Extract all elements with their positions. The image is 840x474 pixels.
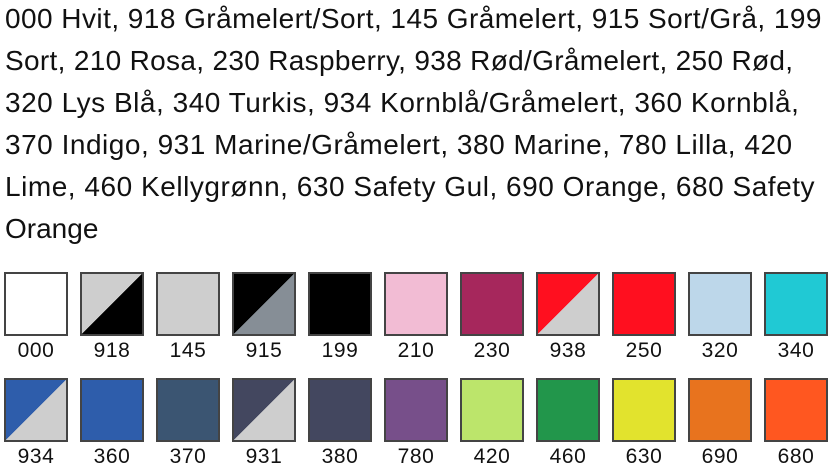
swatch 370: 370	[170, 445, 206, 468]
swatch 915: 915	[246, 339, 282, 362]
swatch 938	[536, 272, 600, 362]
swatch 380	[308, 378, 372, 468]
swatch 690: 690	[702, 445, 738, 468]
swatch 320	[688, 272, 752, 362]
text block: colour list: Sort, 210 Rosa, 230 Raspberry, 938 Rød/Gråmelert, 250 Rød,	[5, 45, 793, 76]
swatch 934: 934	[18, 445, 54, 468]
swatch 934	[4, 378, 68, 468]
swatch 000: 000	[18, 339, 54, 362]
swatch 420	[460, 378, 524, 468]
swatch 210	[384, 272, 448, 362]
swatch 360: 360	[94, 445, 130, 468]
text block: colour list: 370 Indigo, 931 Marine/Gråmelert, 380 Marine, 780 Lilla, 420	[5, 129, 793, 160]
swatch 230: 230	[474, 339, 510, 362]
swatch 780: 780	[398, 445, 434, 468]
swatch 780	[384, 378, 448, 468]
swatch 420: 420	[474, 445, 510, 468]
text block: colour list: Lime, 460 Kellygrønn, 630 Safety Gul, 690 Orange, 680 Safety	[5, 171, 815, 202]
text block: colour list: Orange	[5, 213, 98, 244]
swatch 250	[612, 272, 676, 362]
swatch 938: 938	[550, 339, 586, 362]
swatch 230	[460, 272, 524, 362]
swatch 915	[232, 272, 296, 362]
swatch 000	[4, 272, 68, 362]
swatch 199: 199	[322, 339, 358, 362]
swatch 931	[232, 378, 296, 468]
text block: colour list: 000 Hvit, 918 Gråmelert/Sort, 145 Gråmelert, 915 Sort/Grå, 199	[5, 3, 822, 34]
swatch 460: 460	[550, 445, 586, 468]
swatch 370	[156, 378, 220, 468]
swatch 210: 210	[398, 339, 434, 362]
text block: colour list	[5, 3, 822, 244]
swatch 918	[80, 272, 144, 362]
swatch 630: 630	[626, 445, 662, 468]
swatch 690	[688, 378, 752, 468]
swatch 918: 918	[94, 339, 130, 362]
swatch 250: 250	[626, 339, 662, 362]
swatch 460	[536, 378, 600, 468]
swatch 340	[764, 272, 828, 362]
swatch 360	[80, 378, 144, 468]
swatch 340: 340	[778, 339, 814, 362]
text block: colour list: 320 Lys Blå, 340 Turkis, 934 Kornblå/Gråmelert, 360 Kornblå,	[5, 87, 799, 118]
swatch 199	[308, 272, 372, 362]
swatch 931: 931	[246, 445, 282, 468]
swatch 630	[612, 378, 676, 468]
swatch 680: 680	[778, 445, 814, 468]
swatch 145: 145	[170, 339, 206, 362]
swatch 380: 380	[322, 445, 358, 468]
swatch 145	[156, 272, 220, 362]
swatch 320: 320	[702, 339, 738, 362]
swatch 680	[764, 378, 828, 468]
